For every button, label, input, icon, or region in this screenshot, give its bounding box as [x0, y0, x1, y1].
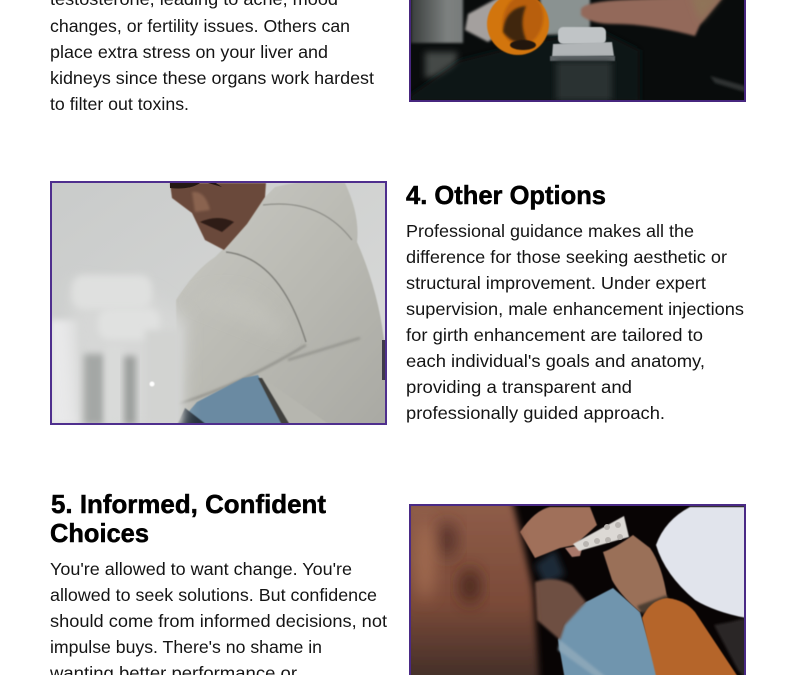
heading: 5. Informed, Confident Choices: Choices — [50, 518, 149, 548]
text block: other options paragraph: each individual's goals and anatomy, — [406, 351, 705, 371]
photo: pill bottle and hand — [400, 0, 746, 102]
text block: informed choices paragraph: should come from informed decisions, not — [50, 611, 387, 631]
blurred glass bottles — [52, 318, 79, 423]
jeans — [189, 374, 282, 423]
text block: other options paragraph: providing a transparent and — [406, 377, 632, 397]
jeans — [558, 588, 660, 675]
orange sleeve — [642, 598, 740, 675]
forearm skin — [535, 579, 586, 640]
text block: side effects paragraph: kidneys since these organs work hardest — [50, 68, 374, 88]
text block: informed choices paragraph: impulse buys. There's no shame in — [50, 637, 322, 657]
text block: informed choices paragraph — [49, 559, 387, 675]
left hand — [520, 507, 597, 558]
blurred head — [405, 500, 540, 675]
heading: 5. Informed, Confident Choices — [50, 489, 326, 548]
face — [170, 183, 266, 250]
photo: hands holding blister pack — [405, 500, 746, 675]
text block: other options paragraph: supervision, male enhancement injections — [406, 299, 744, 319]
text block: informed choices paragraph: allowed to seek solutions. But confidence — [50, 585, 377, 605]
photo: man in grey hoodie — [50, 181, 390, 425]
text block: other options paragraph: Professional guidance makes all the — [406, 221, 694, 241]
text block: side effects paragraph: place extra stress on your liver and — [50, 42, 328, 62]
text block: side effects paragraph — [50, 0, 374, 114]
hoodie — [176, 181, 390, 425]
text block: other options paragraph: difference for those seeking aesthetic or — [406, 247, 727, 267]
dark denim patch — [535, 550, 565, 585]
right hand — [603, 535, 667, 612]
blister pack — [573, 516, 629, 551]
text block: informed choices paragraph: You're allowed to want change. You're — [50, 559, 352, 579]
white cloth — [656, 507, 746, 618]
text block: side effects paragraph: to filter out toxins. — [50, 94, 189, 114]
text block: other options paragraph: for girth enhancement are tailored to — [406, 325, 703, 345]
heading: 5. Informed, Confident Choices: 5. Informed, Confident — [51, 489, 326, 519]
text block: other options paragraph — [406, 221, 744, 423]
text block: other options paragraph: structural improvement. Under expert — [406, 273, 706, 293]
heading: 4. Other Options: 4. Other Options — [406, 180, 606, 210]
text block: side effects paragraph: changes, or fertility issues. Others can — [50, 16, 350, 36]
text block: other options paragraph: professionally guided approach. — [406, 403, 665, 423]
